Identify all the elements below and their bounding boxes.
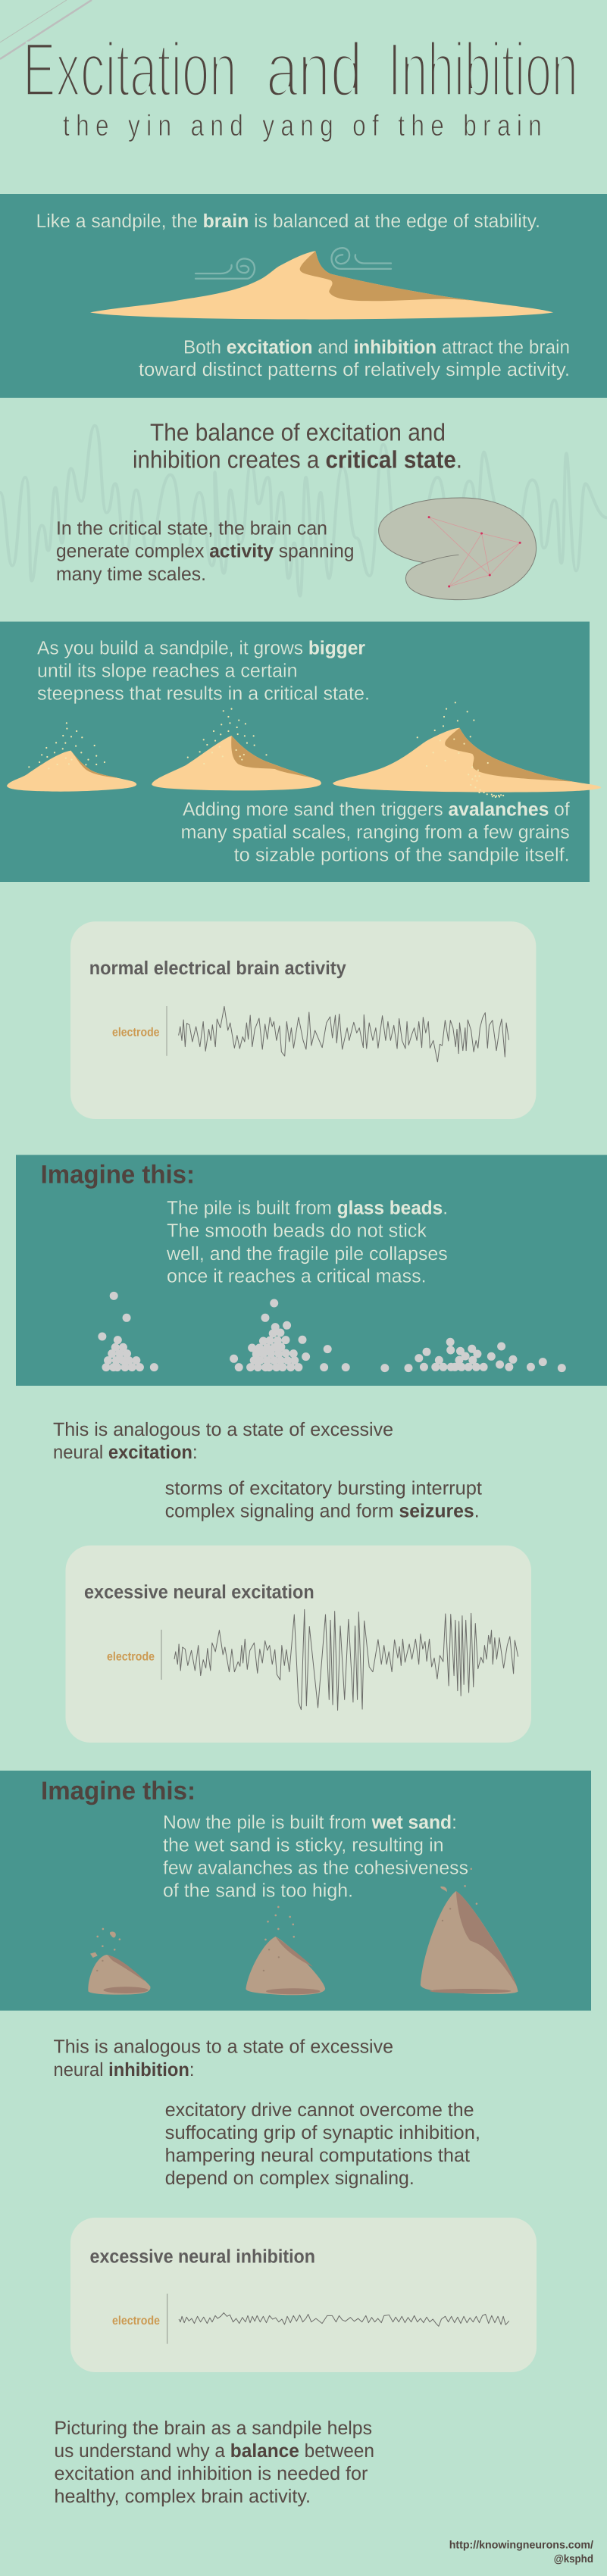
- text: conclusion: [55, 2418, 374, 2507]
- card: normal electrical brain activity: [70, 921, 536, 1119]
- trace: flat EEG: [179, 2313, 509, 2326]
- text: glass beads: once it reaches a critical mass.: [167, 1266, 427, 1287]
- text: complex activity: many time scales.: [56, 564, 206, 585]
- card title: excessive neural inhibition: [89, 2246, 315, 2268]
- title: Inhibition: [388, 27, 578, 112]
- credits: http://knowingneurons.com/: [449, 2540, 593, 2552]
- text: suffocating inhibition: [165, 2099, 480, 2189]
- text: glass beads: The smooth beads do not stick: [167, 1221, 427, 1242]
- text: glass beads: well, and the fragile pile collapses: [166, 1243, 448, 1265]
- text: conclusion: Picturing the brain as a sandpile helps: [55, 2418, 372, 2439]
- illustration: three growing sandpiles: [7, 702, 601, 797]
- text: sandpile grows: As you build a sandpile, it grows bigger: [37, 637, 365, 658]
- text: wet sand: [163, 1812, 468, 1902]
- text: complex activity: [56, 518, 355, 585]
- section: critical state: [0, 419, 607, 600]
- card title: normal electrical brain activity: [89, 958, 346, 979]
- text: wet sand: the wet sand is sticky, resulting in: [163, 1835, 444, 1856]
- illustration: dune with wind: [90, 248, 553, 319]
- heading: imagine this: Imagine this:: [41, 1161, 195, 1190]
- panel: glass beads: [16, 1155, 607, 1386]
- panel: building a sandpile: [0, 621, 601, 882]
- text: excitation and inhibition attract: toward distinct patterns of relatively simple activity.: [139, 359, 570, 380]
- text: analogous to inhibition: This is analogous to a state of excessive: [53, 2037, 393, 2058]
- credits: [449, 2540, 593, 2565]
- subtitle: the yin and yang of the brain: [63, 109, 548, 142]
- text: suffocating inhibition: hampering neural computations that: [165, 2145, 470, 2166]
- title: [23, 27, 578, 112]
- text: sandpile grows: [37, 637, 370, 705]
- card title: excessive neural excitation: [84, 1582, 314, 1603]
- text: edge of stability: Like a sandpile, the brain is balanced at the edge of stability.: [36, 211, 540, 232]
- heading: critical state: The balance of excitation and: [150, 419, 446, 446]
- text: seizures: complex signaling and form seizures.: [165, 1501, 480, 1522]
- text: suffocating inhibition: depend on complex signaling.: [165, 2168, 415, 2189]
- text: wet sand: of the sand is too high.: [163, 1880, 353, 1902]
- text: wet sand: few avalanches as the cohesiveness: [163, 1858, 468, 1879]
- trace: seizure EEG: [174, 1609, 518, 1710]
- text: conclusion: excitation and inhibition is needed for: [55, 2463, 368, 2484]
- text: avalanches: to sizable portions of the sandpile itself.: [234, 845, 570, 866]
- illustration: wet sand piles: [88, 1869, 518, 1995]
- electrode label: electrode: [112, 2315, 160, 2327]
- heading: critical state: inhibition creates a critical state.: [133, 446, 462, 474]
- text: analogous to inhibition: neural inhibition:: [53, 2059, 194, 2080]
- text: seizures: [165, 1478, 482, 1522]
- text: avalanches: [181, 799, 570, 866]
- text: conclusion: healthy, complex brain activity.: [55, 2486, 311, 2507]
- text: avalanches: Adding more sand then triggers avalanches of: [183, 799, 570, 821]
- text: complex activity: generate complex activity spanning: [56, 541, 355, 562]
- panel: wet sand: [0, 1771, 591, 2011]
- text: excitation and inhibition attract: [139, 336, 570, 380]
- credits: @ksphd: [554, 2553, 593, 2565]
- text: conclusion: us understand why a balance between: [55, 2440, 374, 2462]
- text: suffocating inhibition: suffocating grip of synaptic inhibition,: [165, 2122, 480, 2143]
- trace: normal EEG: [179, 1006, 509, 1062]
- text: sandpile grows: until its slope reaches a certain: [37, 661, 297, 682]
- text: glass beads: [166, 1198, 448, 1287]
- text: complex activity: In the critical state, the brain can: [56, 518, 327, 539]
- text: analogous to excitation: [53, 1419, 393, 1463]
- card: excessive neural excitation: [65, 1546, 531, 1743]
- icon: brain network: [379, 498, 537, 600]
- illustration: bead piles: [102, 1296, 562, 1368]
- electrode label: electrode: [107, 1651, 155, 1664]
- card: excessive neural inhibition: [70, 2218, 537, 2372]
- heading: imagine this: Imagine this:: [41, 1777, 196, 1805]
- text: wet sand: Now the pile is built from wet sand:: [163, 1812, 457, 1834]
- text: excitation and inhibition attract: Both excitation and inhibition attract the brain: [183, 336, 570, 358]
- title: Excitation: [23, 27, 236, 112]
- text: glass beads: The pile is built from glass beads.: [167, 1198, 448, 1219]
- electrode label: electrode: [112, 1027, 160, 1039]
- text: avalanches: many spatial scales, ranging from a few grains: [181, 822, 570, 843]
- text: seizures: storms of excitatory bursting interrupt: [165, 1478, 482, 1499]
- text: sandpile grows: steepness that results in a critical state.: [37, 683, 370, 705]
- title: and: [266, 27, 362, 112]
- text: suffocating inhibition: excitatory drive cannot overcome the: [165, 2099, 474, 2121]
- panel: sandpile balance: [0, 194, 607, 398]
- text: analogous to excitation: This is analogous to a state of excessive: [53, 1419, 393, 1440]
- text: analogous to excitation: neural excitation:: [53, 1442, 198, 1463]
- text: analogous to inhibition: [53, 2037, 393, 2080]
- heading: critical state: [133, 419, 462, 474]
